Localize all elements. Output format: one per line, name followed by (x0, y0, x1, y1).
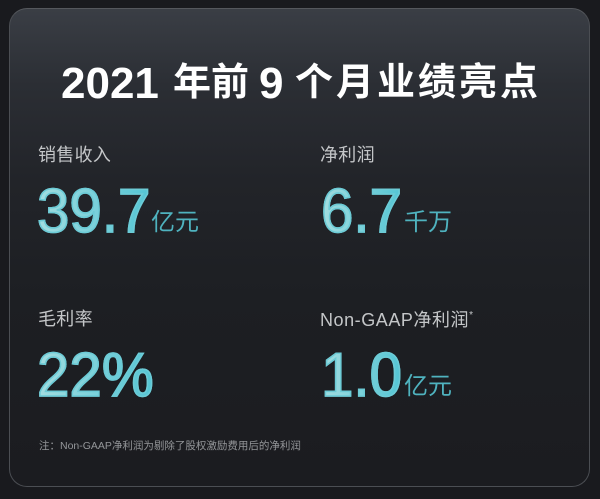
metric: net profit value (321, 177, 452, 246)
metric: gross margin value: 22% (37, 341, 154, 410)
metric: sales revenue value: 39.7 (37, 177, 150, 246)
title: 9 (259, 59, 283, 108)
label: non-GAAP net profit: Non-GAAP净利润* (320, 310, 473, 330)
footnote: 注：Non-GAAP净利润为剔除了股权激励费用后的净利润 (39, 440, 301, 452)
metric: net profit value: 6.7 (321, 177, 402, 246)
metric: non-GAAP net profit value (321, 341, 452, 410)
metric: net profit value: 千万 (404, 209, 452, 236)
label: net profit: 净利润 (320, 145, 375, 165)
metric: sales revenue value: 亿元 (151, 209, 199, 236)
metric: non-GAAP net profit value: 亿元 (404, 373, 452, 400)
label: gross margin: 毛利率 (38, 309, 93, 329)
label: sales revenue: 销售收入 (38, 145, 111, 165)
title: 2021 (61, 59, 159, 108)
metric: non-GAAP net profit value: 1.0 (321, 341, 402, 410)
title: 个月业绩亮点 (295, 62, 541, 104)
title: 年前 (173, 62, 249, 104)
title (61, 59, 541, 108)
